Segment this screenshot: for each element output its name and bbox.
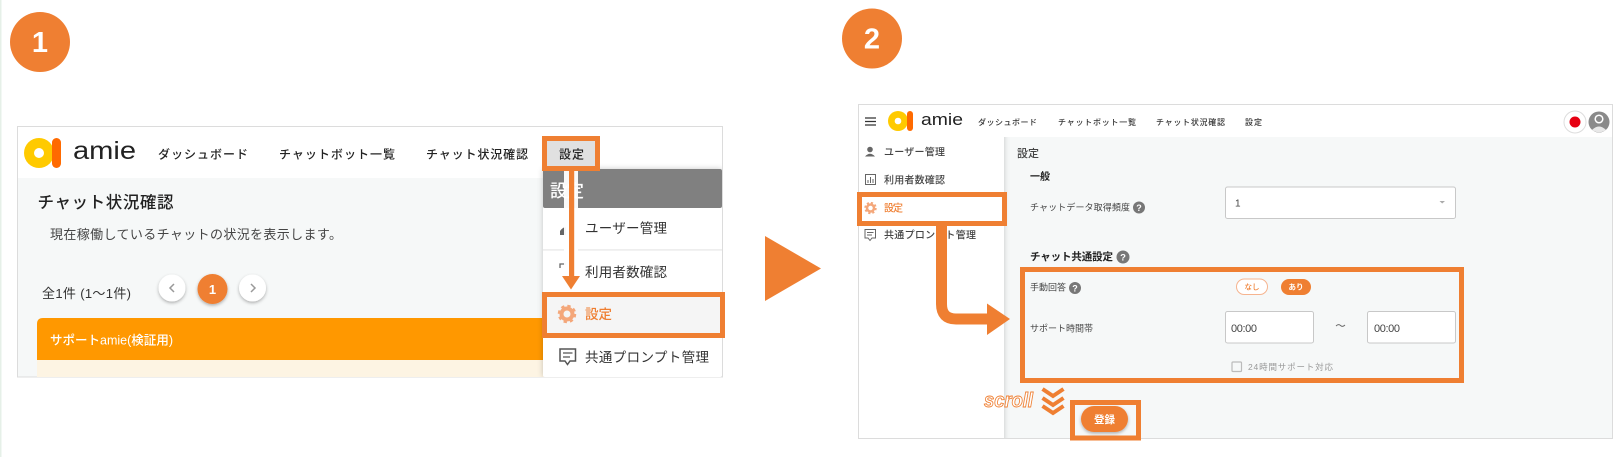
pagination buttons — [158, 274, 266, 304]
icon: hamburger menu — [865, 118, 876, 125]
nav highlight: settings: 設定 — [559, 148, 584, 162]
toggle: off: なし — [1244, 283, 1260, 292]
step badge 2: 2 — [864, 24, 880, 56]
sidebar item: user management — [865, 146, 945, 156]
time input: end — [1368, 312, 1456, 343]
panel: step 1 screenshot — [18, 126, 722, 377]
toggle: on: あり — [1288, 283, 1304, 292]
sidebar — [859, 130, 1004, 450]
menu item: usage check: 利用者数確認 — [585, 265, 668, 280]
sidebar item: usage check: 利用者数確認 — [884, 174, 945, 186]
select box: 1 — [1235, 198, 1241, 210]
pagination buttons: 1 — [209, 282, 216, 297]
field: manual reply: ? — [1072, 283, 1078, 293]
field: manual reply — [1030, 282, 1081, 294]
icon: gear — [865, 203, 876, 213]
toggle: off — [1236, 279, 1268, 294]
checkbox: 24 hour support: 24時間サポート対応 — [1248, 362, 1333, 372]
arrow: sidebar to settings group — [942, 226, 1010, 335]
icon: user avatar — [1588, 112, 1610, 132]
submit button highlight: 登録 — [1094, 413, 1116, 426]
arrow: settings to menu item — [562, 171, 580, 290]
tilde — [1336, 325, 1345, 326]
field: chat data frequency: ? — [1136, 203, 1142, 213]
time input: start: 00:00 — [1231, 323, 1257, 335]
navigation menu: チャット状況確認 — [1156, 117, 1225, 127]
time input: start — [1226, 312, 1314, 343]
section heading: common chat settings: チャット共通設定 — [1030, 250, 1114, 263]
time input: end: 00:00 — [1374, 323, 1400, 335]
navigation menu: 設定 — [1245, 118, 1262, 127]
sidebar highlight: settings — [860, 194, 1004, 224]
status indicator — [1564, 111, 1586, 133]
icon: gear — [559, 306, 575, 322]
panel: step 2 screenshot — [858, 104, 1612, 450]
menu item: user management: ユーザー管理 — [585, 221, 668, 236]
settings group highlight — [1022, 270, 1462, 380]
navigation menu — [978, 117, 1262, 127]
chat card — [37, 318, 544, 377]
menu item: prompt management: 共通プロンプト管理 — [585, 350, 710, 365]
navigation menu — [158, 146, 528, 162]
section heading: general: 一般 — [1030, 170, 1050, 183]
navigation menu: チャットボット一覧 — [279, 146, 395, 162]
page heading: 設定 — [1017, 147, 1039, 160]
sidebar highlight: settings: 設定 — [884, 202, 903, 214]
navigation menu: ダッシュボード — [978, 117, 1037, 127]
step badge 1 — [10, 12, 70, 72]
select box — [1226, 187, 1456, 218]
navigation menu: チャットボット一覧 — [1058, 117, 1136, 127]
nav highlight: settings — [544, 138, 598, 168]
navigation menu: ダッシュボード — [158, 146, 248, 162]
sidebar item: prompt management: 共通プロンプト管理 — [884, 228, 976, 242]
logo: amie — [24, 137, 136, 168]
description text: 現在稼働しているチャットの状況を表示します。 — [50, 227, 342, 242]
logo: amie — [888, 111, 963, 131]
logo: amie: amie — [73, 137, 136, 165]
chat card: サポートamie(検証用) — [50, 332, 173, 348]
field: chat data frequency: チャットデータ取得頻度 — [1030, 202, 1130, 212]
submit button highlight — [1072, 402, 1138, 438]
icon: scroll chevrons — [1042, 389, 1064, 413]
logo: amie: amie — [921, 111, 963, 129]
dropdown menu — [543, 169, 722, 377]
sidebar item: user management: ユーザー管理 — [884, 146, 945, 158]
page heading: チャット状況確認 — [38, 193, 174, 212]
toggle: on — [1281, 279, 1311, 295]
settings menu highlight — [544, 294, 722, 336]
sidebar item: usage check — [865, 174, 945, 185]
navigation menu: チャット状況確認 — [426, 146, 528, 162]
field: support hours: サポート時間帯 — [1030, 322, 1093, 334]
scroll label: scroll — [984, 390, 1033, 412]
step badge 1: 1 — [32, 27, 48, 59]
field: manual reply: 手動回答 — [1030, 282, 1066, 292]
arrow: step 1 to step 2 — [765, 236, 821, 301]
section heading: common chat settings: ? — [1120, 252, 1126, 264]
step badge 2 — [842, 8, 902, 68]
dropdown menu: 設定 — [550, 181, 584, 201]
pagination count: 全1件 (1〜1件) — [42, 286, 131, 301]
settings menu highlight: 設定 — [585, 307, 612, 322]
